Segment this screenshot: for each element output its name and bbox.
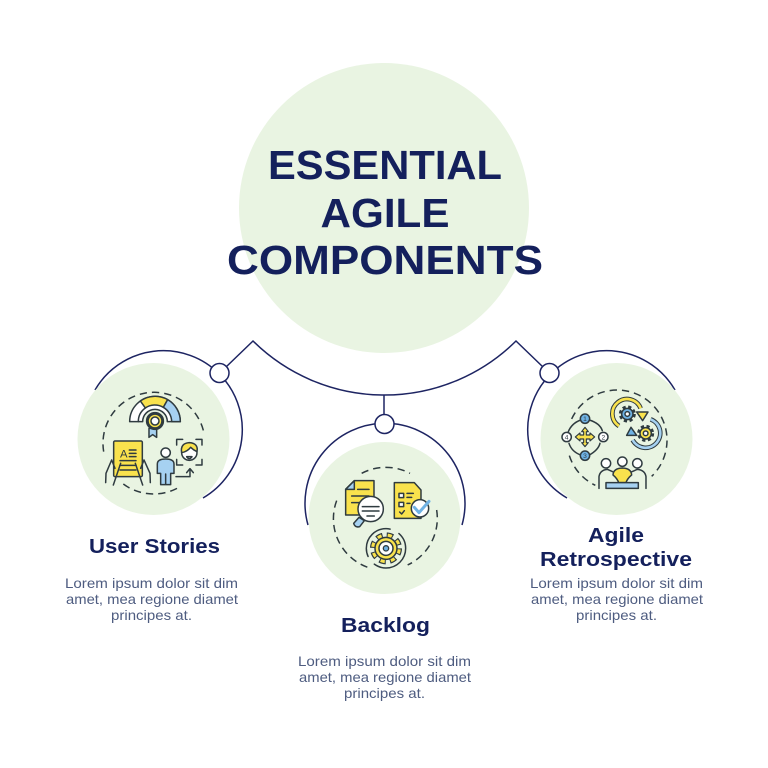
icon: numbered cycle: 1 [583,416,587,423]
user stories node [210,364,229,382]
user stories heading: User Stories [89,536,220,558]
backlog outer arc [305,423,465,525]
user stories body text: amet, mea regione diamet [66,591,238,607]
title: AGILE [320,190,450,236]
retrospective heading [540,525,692,571]
icon: person [157,448,174,485]
icon: tablet with hands: A [120,448,128,460]
retrospective body text: amet, mea regione diamet [531,591,703,607]
title circle [239,63,529,353]
retrospective body text: principes at. [576,607,657,623]
panel: user stories [65,351,242,623]
icon: checklist document [394,483,429,518]
title: COMPONENTS [227,237,543,283]
retrospective background circle [540,363,692,515]
icon: target gear [366,529,406,568]
icon: team at table [599,457,646,488]
retrospective body text: Lorem ipsum dolor sit dim [530,575,703,591]
retrospective node [540,364,559,382]
backlog heading: Backlog [341,615,430,637]
backlog node [375,414,394,434]
icon: face scan [176,439,202,477]
icon: numbered cycle: 3 [583,453,587,460]
icon: numbered cycle: 4 [565,434,569,441]
backlog body text [298,653,471,701]
title: ESSENTIAL [268,142,502,188]
panel: backlog [298,414,471,701]
backlog body text: amet, mea regione diamet [299,669,471,685]
backlog background circle [308,442,460,594]
retrospective heading: Agile [588,525,644,547]
connector lines [226,341,543,414]
icon: document with magnifier [346,481,383,527]
backlog body text: principes at. [344,685,425,701]
user stories body text: Lorem ipsum dolor sit dim [65,575,238,591]
icon: user stories [103,392,204,494]
icon: gauge [130,396,180,437]
icon: retrospective [562,390,667,488]
user stories outer arc [95,351,242,498]
user stories body text [65,575,238,623]
retrospective heading: Retrospective [540,549,692,571]
retrospective body text [530,575,703,623]
user stories background circle [78,363,230,515]
retrospective outer arc [528,351,675,498]
icon: numbered cycle: 2 [601,434,605,441]
icon: numbered cycle [562,414,608,460]
user stories body text: principes at. [111,607,192,623]
icon: gears with cycle arrows [612,399,660,448]
icon: backlog [333,467,437,568]
title [227,142,543,283]
backlog body text: Lorem ipsum dolor sit dim [298,653,471,669]
panel: agile retrospective [528,351,703,623]
